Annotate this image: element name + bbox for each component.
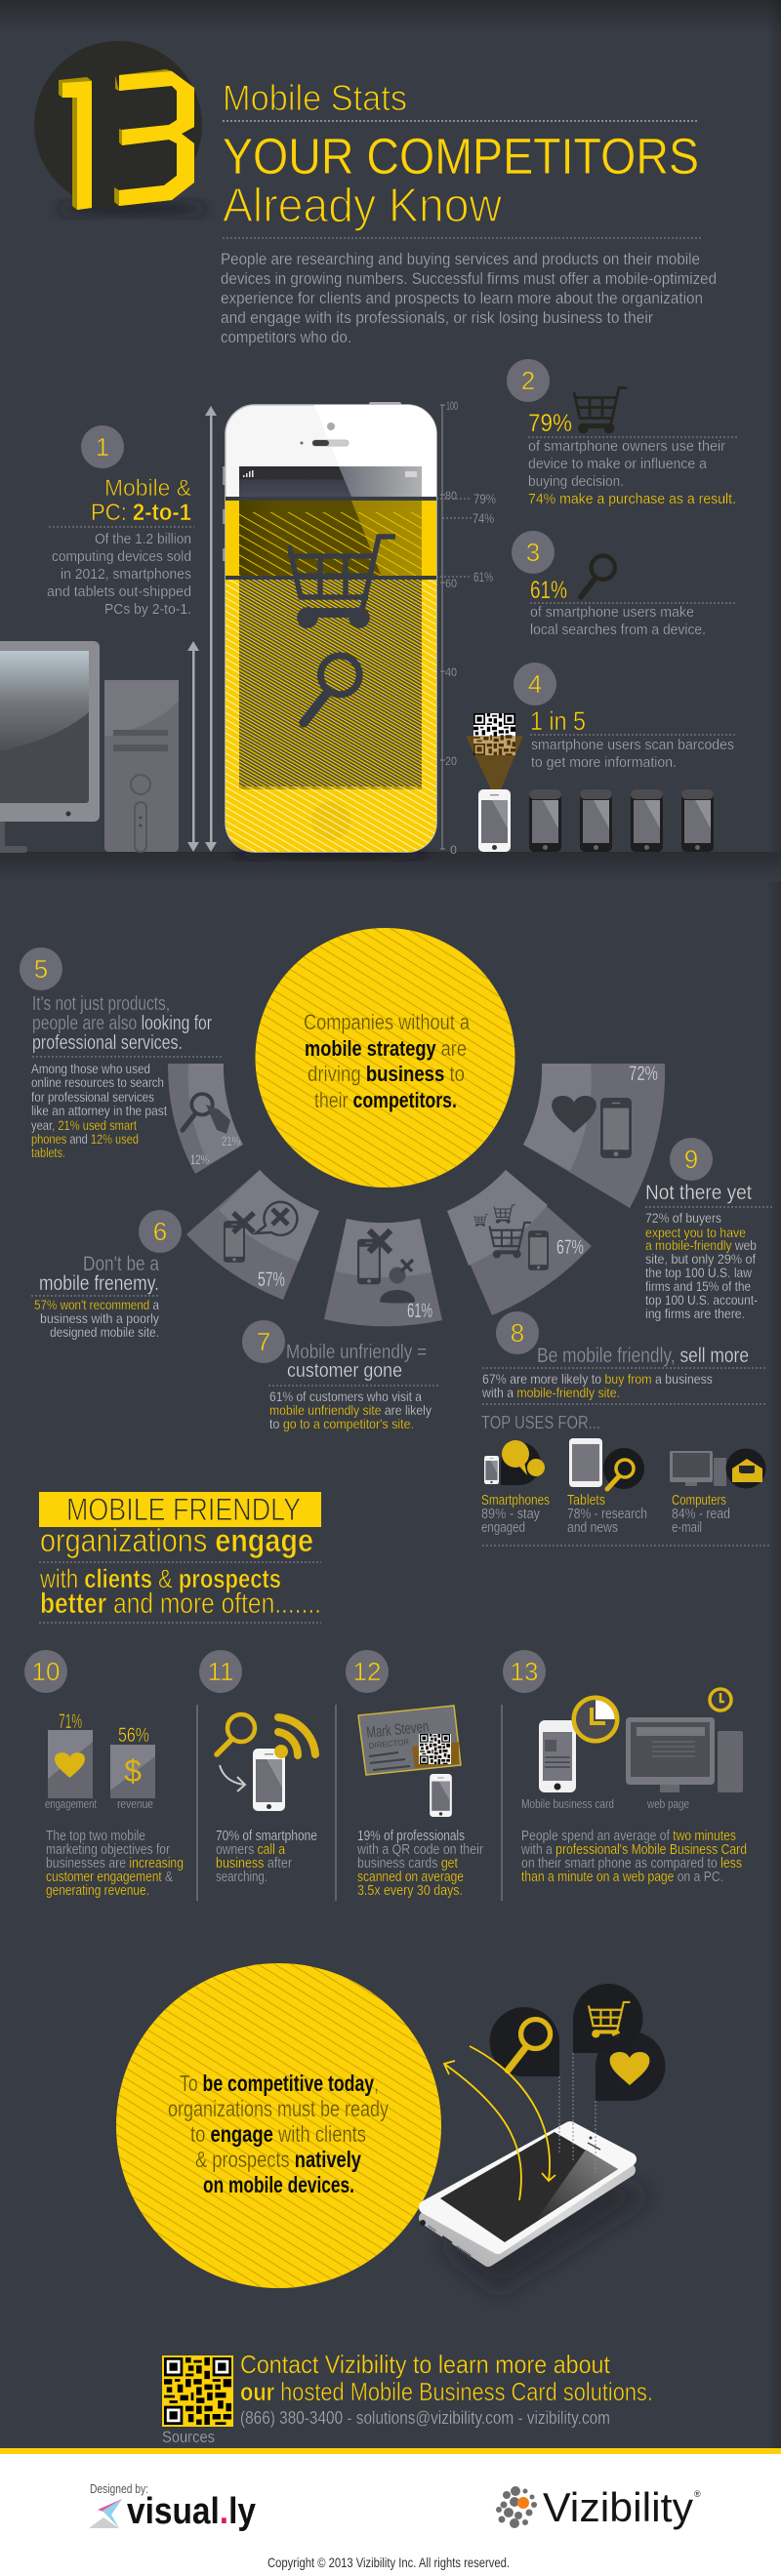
title: Already Know <box>223 180 503 232</box>
stat 9: not there yet: the top 100 U.S. law <box>645 1265 753 1280</box>
percentage scale: 79% <box>473 491 496 506</box>
stat 5: professional services: professional services. <box>32 1032 183 1054</box>
pin: search <box>490 2007 559 2153</box>
stat 6: mobile frenemy: 57% won't recommend a <box>34 1297 159 1312</box>
stat 11: call a business: searching. <box>216 1869 267 1885</box>
stat 4: 1 in 5 with phones: 4 <box>528 669 542 699</box>
stat 8: be mobile friendly <box>481 1311 766 1404</box>
intro paragraph: and engage with its professionals, or risk losing business to their <box>221 309 653 327</box>
segment: 61 percent: 61% <box>407 1300 432 1322</box>
intro paragraph: experience for clients and prospects to learn more about the organization <box>221 290 703 307</box>
stat 10: marketing objectives: 10 <box>32 1657 60 1686</box>
top uses labels: 89% - stay <box>481 1506 540 1522</box>
stat 6: mobile frenemy: 6 <box>153 1217 167 1246</box>
stat 7: mobile unfriendly: 61% of customers who visit a <box>269 1389 422 1404</box>
stat 13: time spent: People spend an average of two minutes <box>521 1828 736 1844</box>
stat 5: professional services: people are also looking for <box>32 1013 212 1034</box>
stat 6: mobile frenemy <box>31 1210 182 1340</box>
title: Mobile Stats <box>223 78 407 118</box>
stat 9: not there yet: 72% of buyers <box>645 1210 721 1226</box>
arrows: height comparison <box>187 406 217 852</box>
percentage scale: 60 <box>445 577 457 590</box>
intro paragraph: competitors who do. <box>221 329 351 346</box>
logo: visual.ly <box>89 2481 256 2532</box>
desktop computer <box>0 641 179 853</box>
intro paragraph <box>221 251 717 346</box>
segment: 57 percent <box>186 1170 319 1300</box>
stat 12: QR on business cards: business cards get <box>357 1855 459 1872</box>
stat 11: call a business <box>199 1650 317 1885</box>
stat 5: professional services: phones and 12% used <box>31 1131 139 1147</box>
stat 7: mobile unfriendly: customer gone <box>287 1360 402 1382</box>
top uses labels: Computers <box>672 1492 726 1509</box>
stat 10: marketing objectives: 56% <box>118 1724 149 1747</box>
stat 1: Mobile and PC: computing devices sold <box>52 548 191 565</box>
stat 10: marketing objectives: The top two mobile <box>46 1828 145 1844</box>
stat 9: not there yet: top 100 U.S. account- <box>645 1292 758 1308</box>
curved arrows <box>444 2046 555 2200</box>
center circle: companies without a mobile strategy: their competitors. <box>314 1088 457 1112</box>
top uses labels: 78% - research <box>567 1506 647 1522</box>
stat 12: QR on business cards: DIRECTOR <box>368 1738 410 1751</box>
stat 8: be mobile friendly: Be mobile friendly, sell more <box>537 1345 749 1367</box>
large smartphone chart <box>223 402 436 859</box>
segment: 21 and 12 percent: 21% <box>222 1133 240 1148</box>
stat 9: not there yet: a mobile-friendly web <box>645 1237 757 1253</box>
percentage scale: 40 <box>445 665 457 679</box>
percentage scale: 74% <box>473 510 494 526</box>
stat 10: marketing objectives: revenue <box>117 1796 153 1811</box>
stat 5: professional services: like an attorney in the past <box>31 1103 167 1118</box>
stat 3: 61 percent: 3 <box>526 538 540 567</box>
stat 5: professional services: tablets. <box>31 1145 65 1160</box>
stat 1: Mobile and PC: 1 <box>96 432 109 462</box>
heading: mobile friendly organizations: with clients & prospects <box>39 1564 281 1593</box>
stat 10: marketing objectives: customer engagement & <box>46 1869 173 1885</box>
stat 11: call a business: 11 <box>207 1657 234 1686</box>
top uses for <box>481 1413 771 1546</box>
stat 4: 1 in 5 with phones <box>466 663 735 852</box>
stat 7: mobile unfriendly: to go to a competitor's site. <box>269 1416 414 1431</box>
stat 2: 79 percent: buying decision. <box>528 473 624 490</box>
stat 11: call a business: 70% of smartphone <box>216 1828 317 1844</box>
stat 9: not there yet: Not there yet <box>645 1182 752 1204</box>
logo: visual.ly: Designed by: <box>90 2481 148 2496</box>
percentage scale: 80 <box>445 489 457 503</box>
stat 9: not there yet: ing firms are there. <box>645 1306 745 1321</box>
stat 4: 1 in 5 with phones: 1 in 5 <box>530 706 586 736</box>
top uses labels: 84% - read <box>672 1506 730 1522</box>
bottom circle: to be competitive today: To be competitive today, <box>180 2071 379 2096</box>
stat 2: 79 percent: 79% <box>528 410 572 437</box>
stat 9: not there yet: expect you to have <box>645 1225 746 1240</box>
stat 7: mobile unfriendly <box>242 1320 438 1431</box>
stat 2: 79 percent: 2 <box>521 366 535 395</box>
stat 8: be mobile friendly: with a mobile-friendly site. <box>481 1385 620 1400</box>
stat 10: marketing objectives: engagement <box>45 1796 97 1811</box>
percentage scale: 100 <box>446 399 458 413</box>
ground strip <box>0 852 781 881</box>
top uses labels: and news <box>567 1519 618 1536</box>
stat 12: QR on business cards: 3.5x every 30 days. <box>357 1882 463 1899</box>
header: number 13 emblem <box>34 41 208 216</box>
stat 3: 61 percent: 61% <box>530 577 567 604</box>
center circle: companies without a mobile strategy: Companies without a <box>304 1010 471 1034</box>
stat 1: Mobile and PC: PCs by 2-to-1. <box>104 601 191 618</box>
stat 13: time spent: Mobile business card <box>521 1796 614 1811</box>
stat 7: mobile unfriendly: mobile unfriendly site are likely <box>269 1402 432 1418</box>
segment: 21 and 12 percent <box>168 1064 243 1174</box>
stat 2: 79 percent: device to make or influence a <box>528 456 708 472</box>
stat 7: mobile unfriendly: 7 <box>257 1327 270 1356</box>
stat 4: 1 in 5 with phones: smartphone users scan barcodes <box>531 737 734 753</box>
contact block: our hosted Mobile Business Card solutions. <box>240 2377 653 2406</box>
stat 9: not there yet: firms and 15% of the <box>645 1278 751 1294</box>
percentage scale <box>436 399 496 857</box>
stat 5: professional services: year, 21% used smart <box>31 1117 137 1133</box>
stat 10: marketing objectives: businesses are increasing <box>46 1855 184 1872</box>
heading: mobile friendly organizations: MOBILE FRIENDLY <box>66 1492 301 1527</box>
icon: tablet with magnifier <box>569 1438 644 1489</box>
contact block <box>162 2350 653 2446</box>
stat 10: marketing objectives: $ <box>124 1753 142 1789</box>
stat 5: professional services: 5 <box>34 954 48 984</box>
percentage scale: 61% <box>473 569 493 584</box>
stat 1: Mobile and PC: and tablets out-shipped <box>47 584 191 600</box>
stat 5: professional services: It's not just products, <box>32 993 170 1015</box>
stat 12: QR on business cards: 12 <box>353 1657 381 1686</box>
stat 12: QR on business cards <box>346 1650 483 1899</box>
pin: heart <box>596 2032 666 2175</box>
bottom circle: to be competitive today: & prospects natively <box>195 2147 361 2172</box>
stat 12: QR on business cards: 19% of professionals <box>357 1828 465 1844</box>
stat 12: QR on business cards: scanned on average <box>357 1869 464 1885</box>
stat 6: mobile frenemy: mobile frenemy. <box>39 1272 159 1295</box>
heading: mobile friendly organizations: organizations engage <box>40 1522 313 1558</box>
segment: 67 percent: 67% <box>556 1236 584 1259</box>
stat 11: call a business: business after <box>216 1855 292 1872</box>
copyright: Copyright © 2013 Vizibility Inc. All rights reserved. <box>267 2555 510 2570</box>
stat 3: 61 percent <box>512 531 735 638</box>
contact block: Contact Vizibility to learn more about <box>240 2350 611 2379</box>
stat 1: Mobile and PC: PC: 2-to-1 <box>91 500 191 526</box>
stat 13: time spent: than a minute on a web page on a PC. <box>521 1869 723 1885</box>
stat 4: 1 in 5 with phones: to get more information. <box>531 754 677 771</box>
stat 13: time spent: 13 <box>511 1657 538 1686</box>
segment: 57 percent: 57% <box>258 1268 285 1291</box>
stat 11: call a business: owners call a <box>216 1841 286 1858</box>
stat 13: time spent: on their smart phone as compared to less <box>521 1855 742 1872</box>
stat 2: 79 percent <box>507 359 737 507</box>
stat 10: marketing objectives <box>24 1650 184 1899</box>
stat 8: be mobile friendly: 67% are more likely to buy from a business <box>482 1371 713 1387</box>
title <box>223 78 703 238</box>
icon: smartphone with chat bubbles <box>484 1440 545 1485</box>
stat 12: QR on business cards: with a QR code on their <box>356 1841 483 1858</box>
stat 13: time spent: web page <box>646 1796 689 1811</box>
stat 6: mobile frenemy: Don't be a <box>83 1253 159 1275</box>
stat 10: marketing objectives: 71% <box>59 1711 82 1733</box>
stat 12: QR on business cards: Mark Steven <box>366 1718 430 1742</box>
stat 9: not there yet <box>645 1138 773 1321</box>
contact block: (866) 380-3400 - solutions@vizibility.com - vizibility.com <box>240 2408 610 2428</box>
stat 3: 61 percent: local searches from a device. <box>530 622 706 638</box>
logo: visual.ly: visual.ly <box>127 2491 256 2532</box>
stat 6: mobile frenemy: business with a poorly <box>40 1310 159 1326</box>
column dividers <box>197 1705 502 1901</box>
center circle: companies without a mobile strategy <box>256 928 515 1187</box>
stat 10: marketing objectives: marketing objectives for <box>46 1841 170 1858</box>
icon: computer with envelope <box>670 1448 765 1489</box>
stat 2: 79 percent: of smartphone owners use their <box>528 438 725 455</box>
heading: mobile friendly organizations <box>39 1492 321 1623</box>
bottom circle: to be competitive today: organizations must be ready <box>168 2096 389 2121</box>
percentage scale: 20 <box>445 754 457 768</box>
intro paragraph: People are researching and buying services and products on their mobile <box>221 251 700 268</box>
stat 1: Mobile and PC <box>47 425 194 618</box>
stat 10: marketing objectives: generating revenue. <box>46 1882 149 1899</box>
top uses labels: Smartphones <box>481 1492 550 1509</box>
stat 1: Mobile and PC: Mobile & <box>104 475 191 502</box>
title: YOUR COMPETITORS <box>223 129 699 185</box>
logo: Vizibility: Vizibility <box>543 2484 693 2530</box>
top uses labels <box>481 1492 730 1536</box>
stat 2: 79 percent: 74% make a purchase as a result. <box>528 491 736 507</box>
stat 13: time spent <box>503 1650 747 1885</box>
top uses labels: engaged <box>481 1519 525 1536</box>
top uses for: TOP USES FOR... <box>481 1413 600 1432</box>
footer band <box>0 2448 781 2576</box>
stat 9: not there yet: 9 <box>684 1145 698 1174</box>
intro paragraph: devices in growing numbers. Successful firms must offer a mobile-optimized <box>221 270 717 288</box>
pin: cart <box>573 1984 642 2160</box>
percentage scale: 0 <box>450 843 457 857</box>
center circle: companies without a mobile strategy: mobile strategy are <box>305 1036 467 1061</box>
bottom circle: to be competitive today <box>116 1963 441 2288</box>
stat 1: Mobile and PC: Of the 1.2 billion <box>95 531 191 547</box>
bottom circle: to be competitive today: to engage with clients <box>190 2121 366 2147</box>
stat 5: professional services: Among those who used <box>31 1061 150 1076</box>
segment: 61 percent <box>324 1219 442 1326</box>
segment: 72 percent <box>523 1063 665 1208</box>
top uses labels: e-mail <box>672 1519 702 1536</box>
segment: 67 percent <box>447 1170 592 1315</box>
bottom circle: to be competitive today: on mobile devices. <box>203 2172 354 2197</box>
stat 5: professional services: online resources to search <box>31 1074 164 1090</box>
contact block: Sources <box>162 2428 215 2446</box>
stat 5: professional services: for professional services <box>31 1089 154 1105</box>
stat 5: professional services <box>20 947 224 1160</box>
stat 9: not there yet: site, but only 29% of <box>645 1251 756 1267</box>
top uses labels: Tablets <box>567 1492 605 1509</box>
isometric smartphone <box>420 2128 652 2293</box>
center circle: companies without a mobile strategy: driving business to <box>308 1062 465 1086</box>
stat 1: Mobile and PC: in 2012, smartphones <box>61 566 191 583</box>
segment: 21 and 12 percent: 12% <box>190 1151 209 1167</box>
heading: mobile friendly organizations: better and more often....... <box>40 1588 321 1620</box>
segment: 72 percent: 72% <box>629 1063 658 1085</box>
stat 7: mobile unfriendly: Mobile unfriendly = <box>286 1342 427 1363</box>
stat 3: 61 percent: of smartphone users make <box>530 604 694 621</box>
stat 6: mobile frenemy: designed mobile site. <box>50 1324 159 1340</box>
stat 8: be mobile friendly: 8 <box>511 1318 524 1348</box>
logo: Vizibility: ® <box>694 2489 701 2499</box>
